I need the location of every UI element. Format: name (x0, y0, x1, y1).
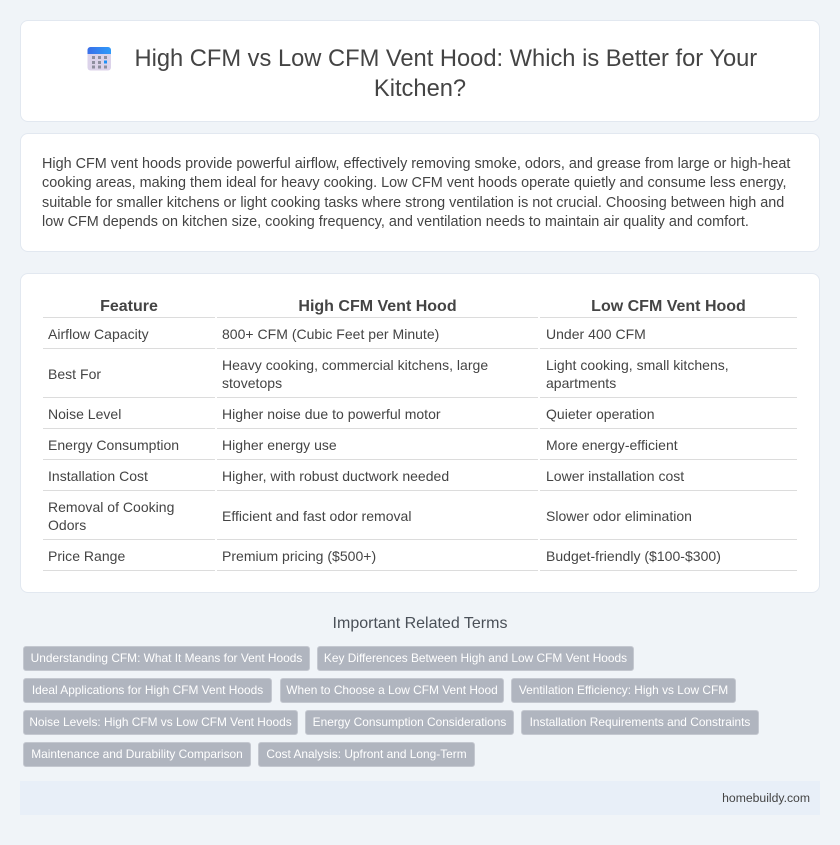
panel: comparison table (20, 273, 820, 593)
summary text: suitable for smaller kitchens or light cooking tasks where strong ventilation is not crucial. Choosing between high and (42, 195, 784, 211)
tag (23, 742, 251, 767)
footer credit: homebuildy.com (722, 791, 810, 805)
tag (23, 710, 298, 735)
row: installation cost (48, 468, 684, 484)
row: removal of cooking odors (48, 499, 692, 533)
row: noise level: Quieter operation (546, 406, 655, 422)
tag (305, 710, 514, 735)
row: best for: Light cooking, small kitchens, (546, 357, 729, 373)
row: price range: Price Range (48, 548, 125, 564)
tag (511, 678, 736, 703)
table header (100, 298, 746, 315)
row: noise level (48, 406, 655, 422)
row: energy consumption (48, 437, 678, 453)
tag: Understanding CFM: What It Means for Vent Hoods (31, 651, 302, 665)
icon: calendar (88, 47, 111, 70)
title: Kitchen? (374, 76, 466, 102)
title: High CFM vs Low CFM Vent Hood: Which is Better for Your (134, 46, 757, 72)
tag: Cost Analysis: Upfront and Long-Term (266, 747, 467, 761)
row: airflow capacity: Under 400 CFM (546, 326, 646, 342)
tag (23, 678, 272, 703)
row: installation cost: Higher, with robust ductwork needed (222, 468, 449, 484)
tag list (23, 646, 759, 767)
panel: summary (20, 133, 820, 252)
tag (521, 710, 759, 735)
row: removal of cooking odors: Slower odor elimination (546, 508, 692, 524)
row: removal of cooking odors: Odors (48, 517, 86, 533)
row: best for: apartments (546, 375, 616, 391)
tag: Maintenance and Durability Comparison (31, 747, 243, 761)
table header: Low CFM Vent Hood (591, 298, 746, 315)
row: airflow capacity: 800+ CFM (Cubic Feet per Minute) (222, 326, 439, 342)
summary text (42, 156, 790, 230)
row: removal of cooking odors: Efficient and fast odor removal (222, 508, 411, 524)
tag (23, 646, 310, 671)
row: energy consumption: More energy-efficient (546, 437, 678, 453)
panel: header (20, 20, 820, 122)
tag: Ventilation Efficiency: High vs Low CFM (519, 683, 728, 697)
row: best for: Best For (48, 366, 101, 382)
summary text: cooking areas, making them ideal for heavy cooking. Low CFM vent hoods operate quietly and consume less energy, (42, 175, 786, 191)
row: airflow capacity: Airflow Capacity (48, 326, 149, 342)
row: noise level: Noise Level (48, 406, 121, 422)
summary text: High CFM vent hoods provide powerful airflow, effectively removing smoke, odors, and grease from large or high-heat (42, 156, 790, 172)
row: installation cost: Installation Cost (48, 468, 148, 484)
footer bar (20, 781, 820, 815)
row: price range: Budget-friendly ($100-$300) (546, 548, 721, 564)
tag (317, 646, 634, 671)
table header: Feature (100, 298, 158, 315)
tag (280, 678, 504, 703)
tag: Ideal Applications for High CFM Vent Hoods (32, 683, 263, 697)
row: energy consumption: Higher energy use (222, 437, 337, 453)
tag: When to Choose a Low CFM Vent Hood (286, 683, 498, 697)
tag: Installation Requirements and Constraints (530, 715, 750, 729)
tag: Noise Levels: High CFM vs Low CFM Vent Hoods (29, 715, 292, 729)
title (134, 46, 757, 102)
table header: High CFM Vent Hood (298, 298, 457, 315)
row: noise level: Higher noise due to powerful motor (222, 406, 441, 422)
summary text: low CFM depends on kitchen size, cooking frequency, and ventilation needs to maintain air quality and comfort. (42, 214, 749, 230)
tag (258, 742, 475, 767)
row: best for: Heavy cooking, commercial kitchens, large (222, 357, 488, 373)
heading: important related terms: Important Related Terms (333, 615, 507, 632)
tag: Key Differences Between High and Low CFM Vent Hoods (324, 651, 627, 665)
tag: Energy Consumption Considerations (313, 715, 506, 729)
row: installation cost: Lower installation cost (546, 468, 684, 484)
row: price range (48, 548, 721, 564)
row: airflow capacity (48, 326, 646, 342)
row: best for: stovetops (222, 375, 282, 391)
row: price range: Premium pricing ($500+) (222, 548, 376, 564)
row: energy consumption: Energy Consumption (48, 437, 179, 453)
row: removal of cooking odors: Removal of Cooking (48, 499, 174, 515)
row: best for (48, 357, 729, 391)
